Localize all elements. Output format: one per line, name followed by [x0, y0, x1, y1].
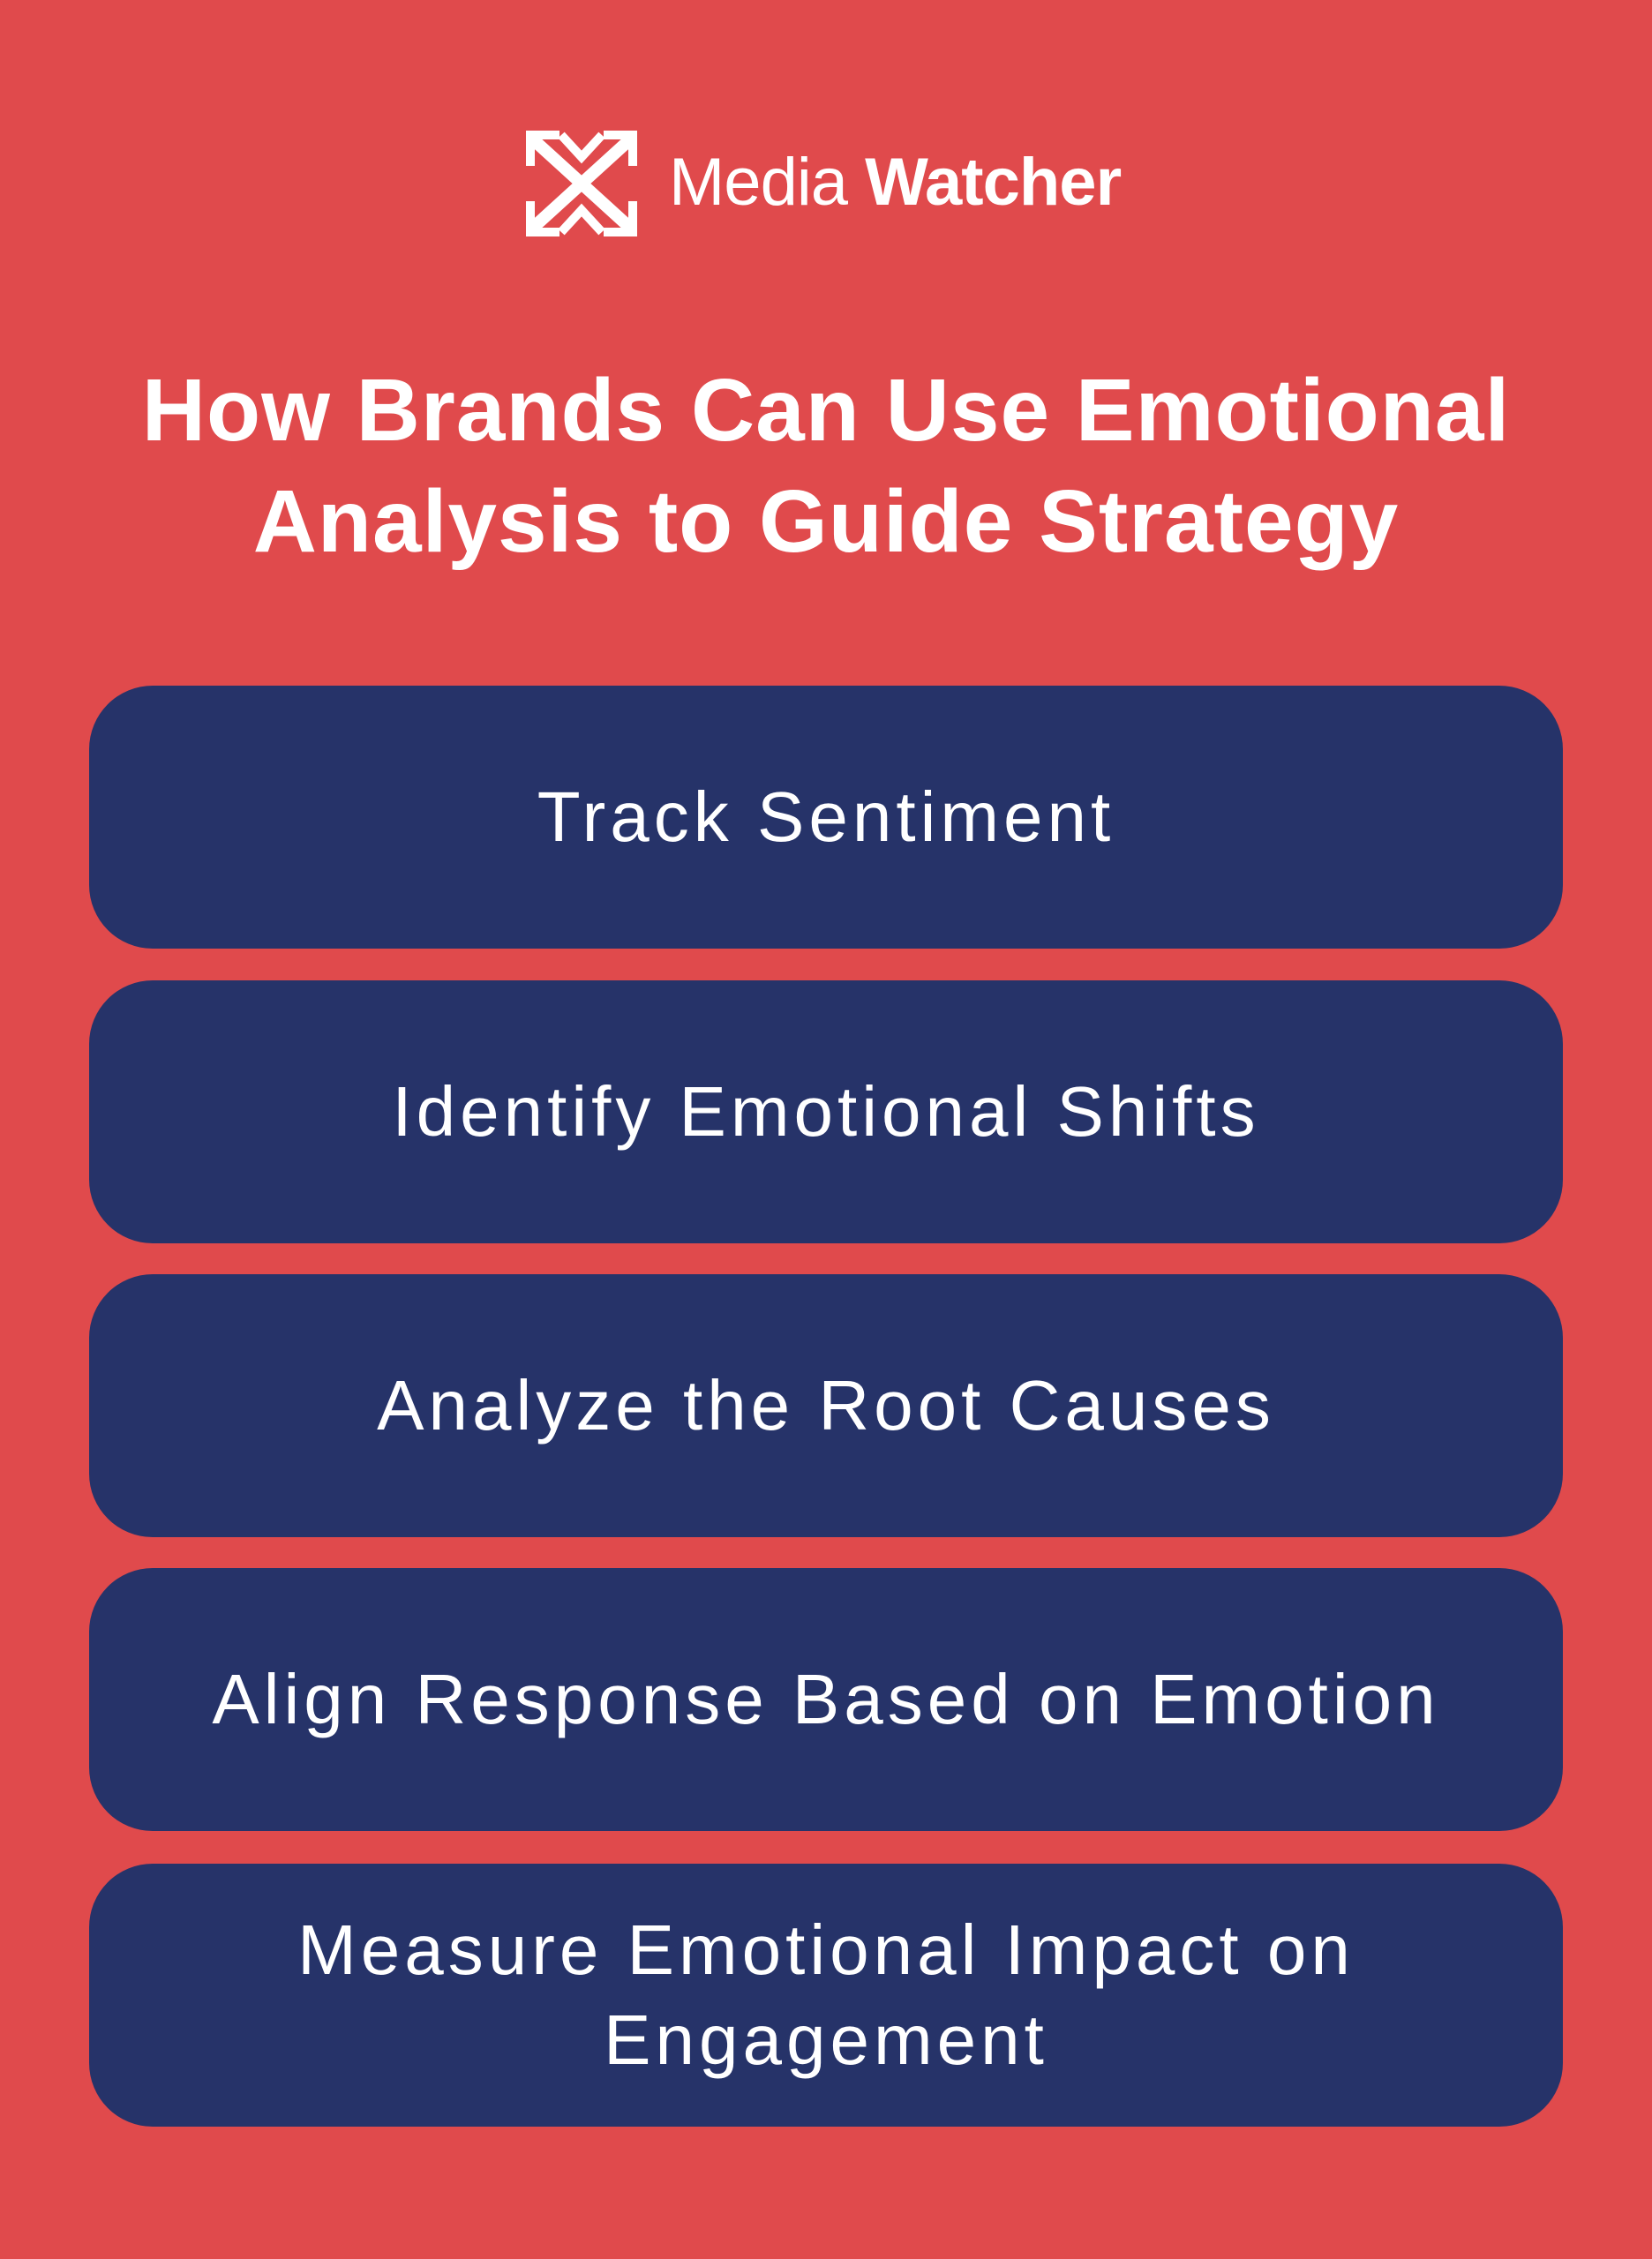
logo: [526, 131, 1121, 236]
panel: track sentiment: Track Sentiment: [537, 777, 1115, 856]
panel: identify emotional shifts: Identify Emotional Shifts: [392, 1072, 1260, 1151]
title: How Brands Can Use Emotional: [142, 361, 1510, 460]
panel: identify emotional shifts: [89, 980, 1563, 1243]
panel: measure impact: Measure Emotional Impact on: [297, 1910, 1355, 1989]
icon: logo mark: [526, 131, 637, 236]
panel: analyze root causes: Analyze the Root Causes: [377, 1366, 1275, 1445]
brand name: Media Watcher: [669, 145, 1121, 220]
panel: analyze root causes: [89, 1274, 1563, 1537]
panel: measure impact: [89, 1864, 1563, 2127]
panel: track sentiment: [89, 686, 1563, 949]
title: [142, 361, 1510, 571]
panel: align response: [89, 1568, 1563, 1831]
panel: align response: Align Response Based on Emotion: [212, 1660, 1440, 1738]
panel: measure impact: Engagement: [604, 2000, 1048, 2079]
title: Analysis to Guide Strategy: [253, 472, 1399, 571]
